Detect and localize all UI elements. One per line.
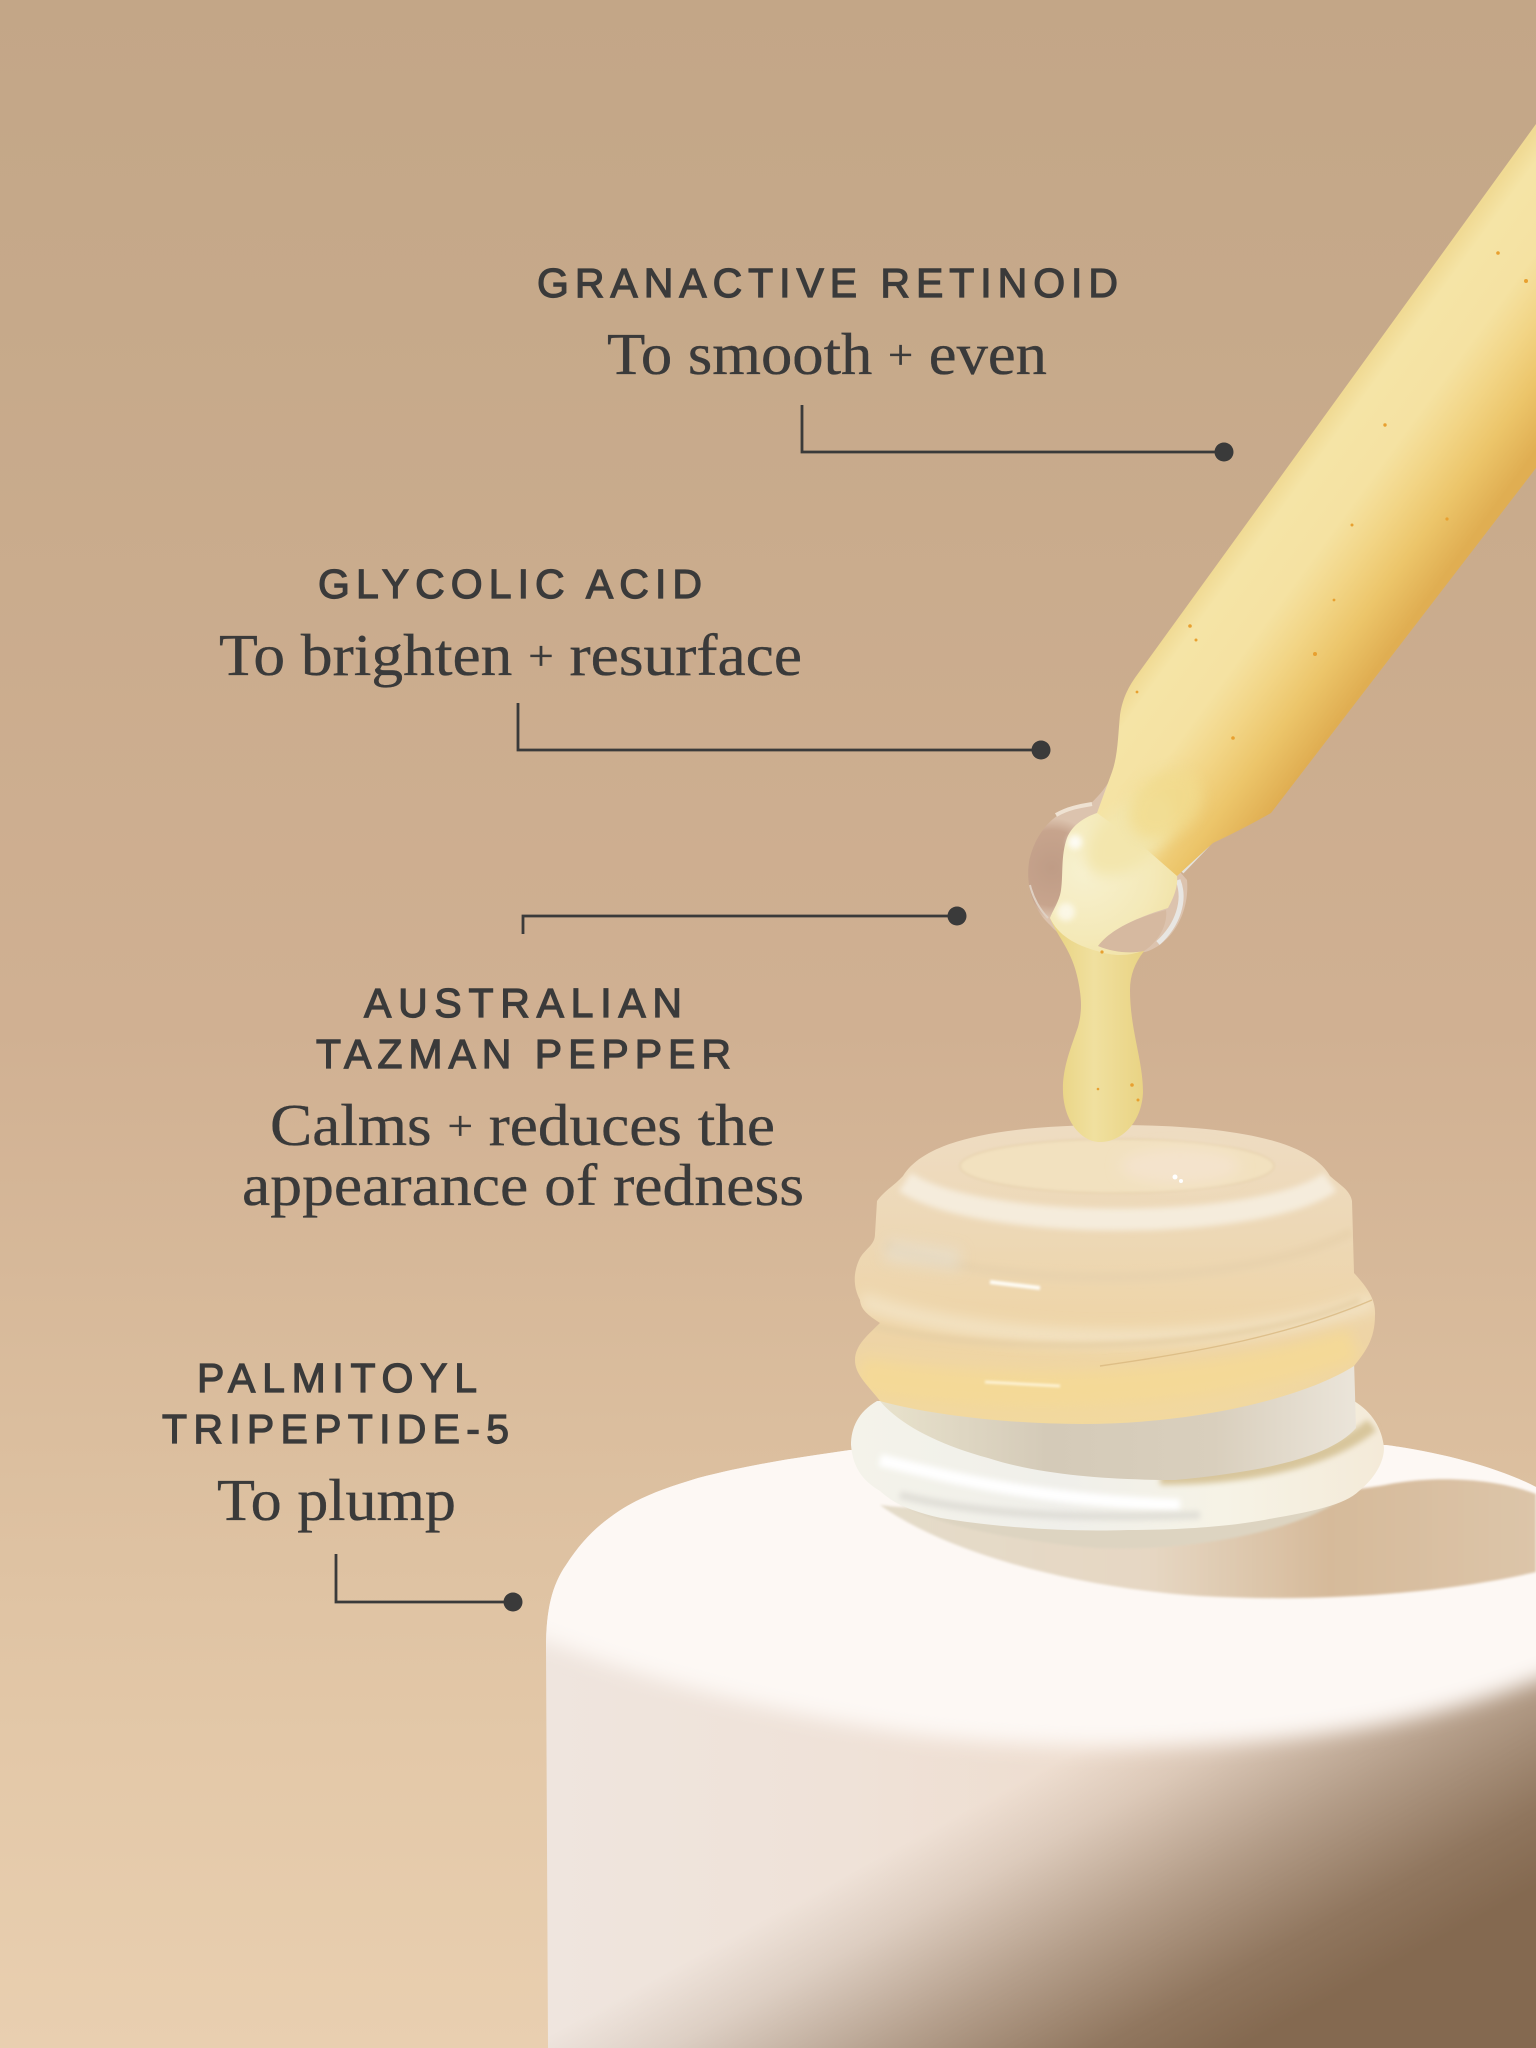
bottle shoulder top	[546, 1445, 1536, 1756]
glass inner opening	[960, 1139, 1274, 1193]
leader line	[336, 1554, 522, 1612]
heading: AUSTRALIAN	[364, 980, 682, 1026]
leader line	[518, 703, 1050, 760]
bottle neck	[880, 1360, 1356, 1480]
serum specks	[1097, 251, 1528, 1101]
bottle	[546, 1445, 1536, 2048]
neck base	[880, 1480, 1358, 1548]
collar ring	[851, 1401, 1384, 1530]
callout: glycolic acid	[219, 561, 1050, 760]
heading	[316, 980, 731, 1077]
bulb highlights	[1068, 835, 1082, 849]
description: appearance of redness	[242, 1152, 804, 1218]
leader line	[523, 906, 966, 934]
cream inside bulb	[1050, 760, 1215, 955]
lens in bulb	[1098, 910, 1166, 952]
neck blend	[1082, 776, 1200, 878]
pipette with serum drop	[1028, 124, 1536, 1142]
leader line	[802, 405, 1234, 462]
description: Calms	[270, 1092, 421, 1158]
glass pipette collar	[855, 1125, 1375, 1424]
description: resurface	[554, 622, 802, 688]
heading: TRIPEPTIDE-5	[162, 1406, 509, 1452]
description: To smooth	[607, 321, 857, 387]
heading	[162, 1355, 509, 1452]
description: To brighten	[219, 622, 492, 688]
heading: TAZMAN PEPPER	[316, 1031, 731, 1077]
description	[242, 1092, 804, 1218]
heading: GLYCOLIC ACID	[318, 561, 702, 607]
dropper tube	[1097, 124, 1536, 876]
description: +	[448, 1104, 473, 1150]
heading: GRANACTIVE RETINOID	[537, 260, 1118, 306]
callout: granactive retinoid	[537, 260, 1234, 462]
description: +	[528, 634, 554, 680]
bottle body shade	[576, 1670, 1536, 2048]
serum stream and drop	[1050, 918, 1145, 1142]
glass bulb	[1028, 772, 1212, 954]
description: To plump	[217, 1467, 456, 1533]
description: +	[888, 333, 913, 379]
heading: PALMITOYL	[197, 1355, 477, 1401]
description: even	[913, 321, 1047, 387]
callout: australian tazman pepper	[242, 906, 966, 1218]
cast shadow on shoulder	[880, 1479, 1536, 1598]
description: reduces the	[473, 1092, 775, 1158]
callout: palmitoyl tripeptide-5	[162, 1355, 522, 1612]
